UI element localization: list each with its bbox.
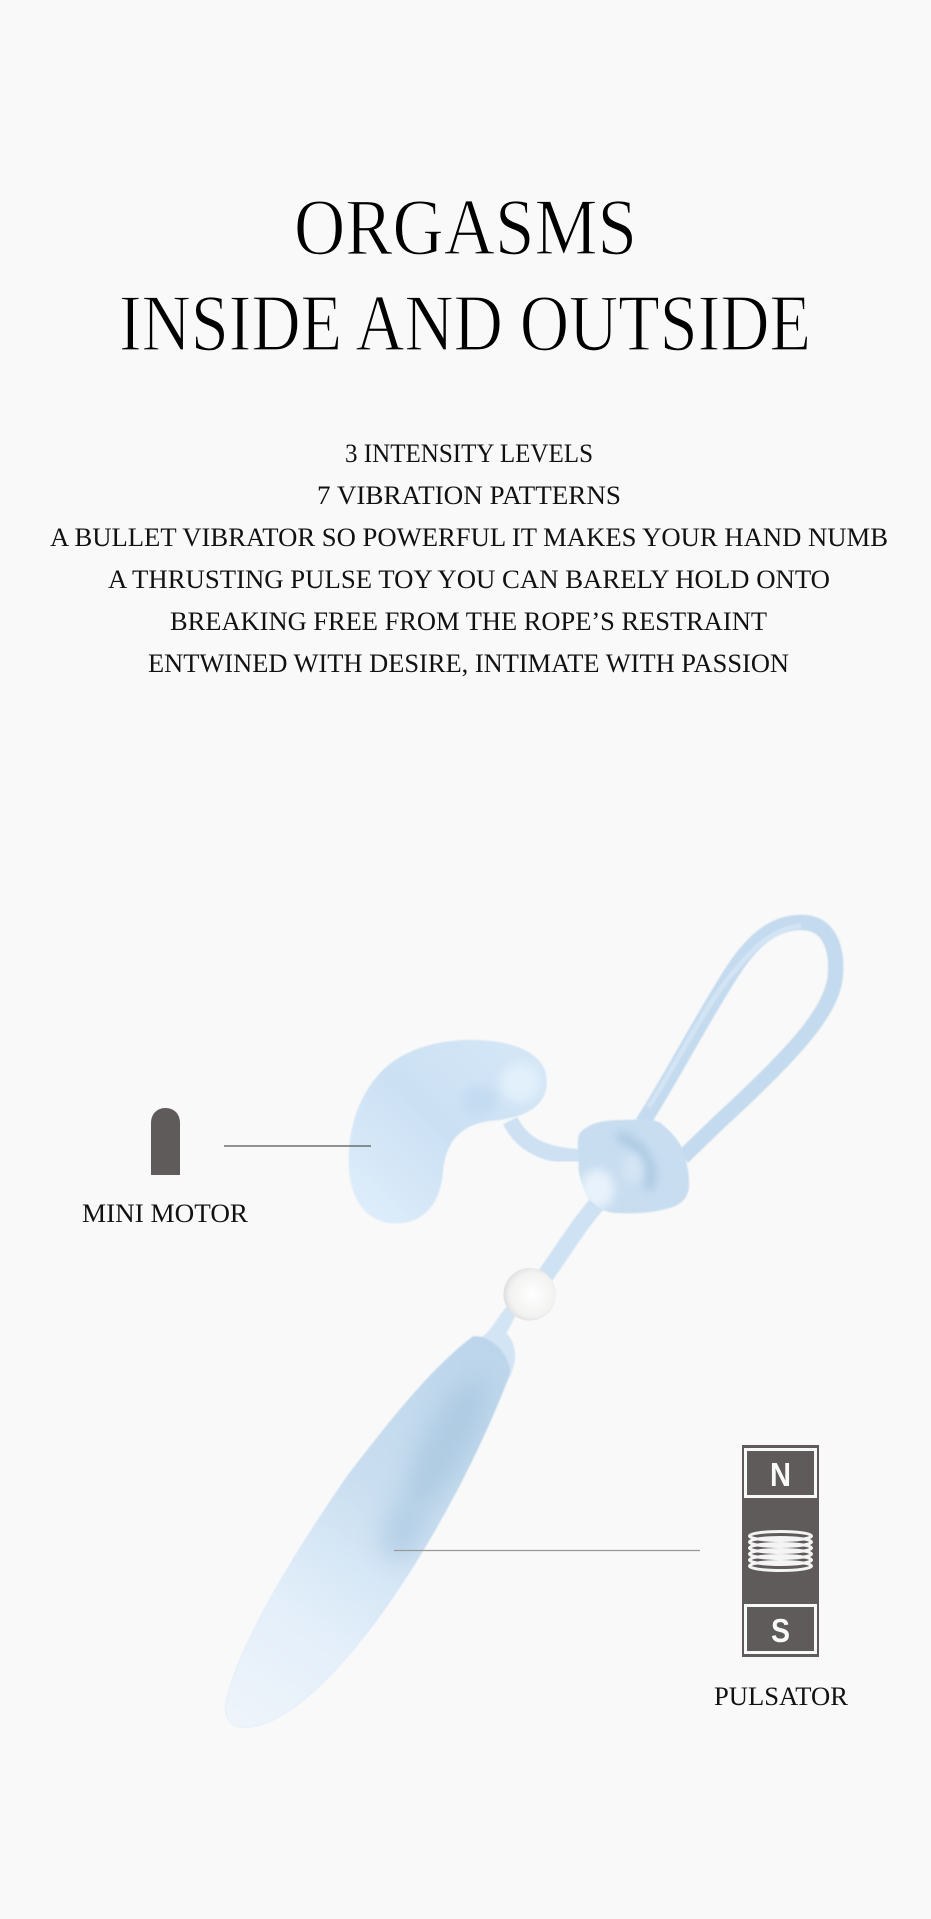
feature list: A THRUSTING PULSE TOY YOU CAN BARELY HOLD ONTO: [108, 565, 830, 594]
north pole box: N: [770, 1456, 791, 1493]
leader line: mini motor: [224, 1145, 371, 1147]
title: ORGASMS: [294, 184, 637, 272]
north pole box: [746, 1450, 816, 1496]
loop cord: [642, 922, 836, 1157]
connector cord: [510, 1121, 585, 1157]
icon: mini motor: [151, 1108, 180, 1175]
leader line: pulsator: [394, 1550, 700, 1552]
title: [119, 184, 811, 368]
head: [349, 1040, 547, 1223]
feature list: BREAKING FREE FROM THE ROPE’S RESTRAINT: [170, 607, 767, 636]
wand: [225, 1304, 519, 1728]
coil: [750, 1532, 812, 1570]
feature list: A BULLET VIBRATOR SO POWERFUL IT MAKES YOUR HAND NUMB: [50, 523, 888, 552]
lower cord: [541, 1201, 599, 1282]
infographic canvas: [50, 201, 887, 1728]
product illustration: [225, 922, 836, 1728]
knot: [578, 1119, 689, 1213]
south pole box: [746, 1606, 816, 1652]
feature list: 7 VIBRATION PATTERNS: [317, 481, 621, 510]
label: pulsator: PULSATOR: [714, 1682, 849, 1711]
title: INSIDE AND OUTSIDE: [119, 280, 811, 368]
south pole box: S: [771, 1612, 790, 1649]
feature list: 3 INTENSITY LEVELS: [345, 439, 593, 468]
feature list: ENTWINED WITH DESIRE, INTIMATE WITH PASSION: [148, 649, 789, 678]
icon: pulsator: [742, 1445, 819, 1657]
feature list: [50, 439, 888, 678]
pearl bead: [503, 1268, 556, 1321]
label: mini motor: MINI MOTOR: [82, 1199, 249, 1228]
